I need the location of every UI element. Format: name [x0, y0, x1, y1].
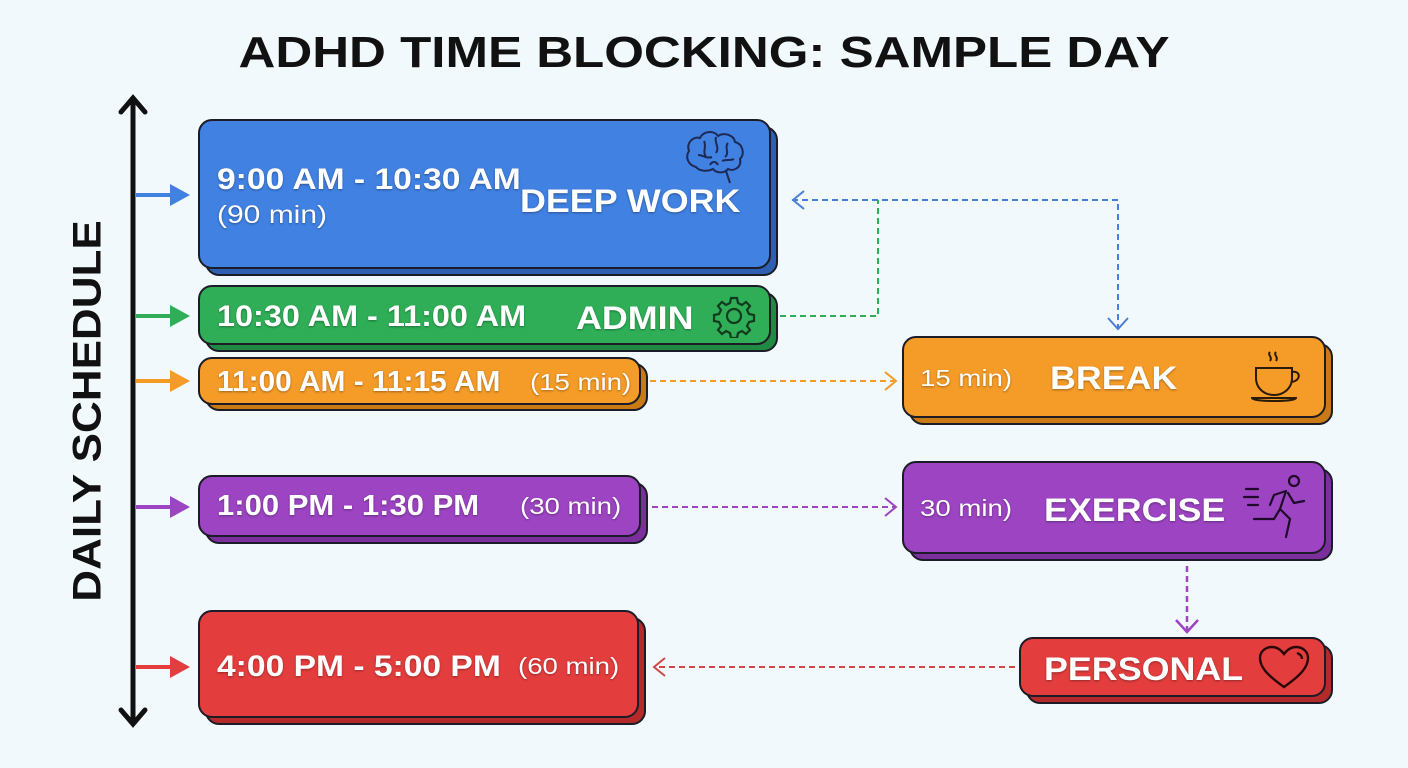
block: deep work — [198, 119, 771, 269]
axis arrows — [136, 184, 190, 678]
block: 1:00 PM: 1:00 PM - 1:30 PM — [217, 490, 479, 522]
icon: coffee cup — [1251, 351, 1300, 402]
icon: brain — [686, 131, 744, 184]
block: deep work: 9:00 AM - 10:30 AM — [217, 163, 521, 196]
block: 4:00 PM: 4:00 PM - 5:00 PM — [217, 650, 501, 683]
timeline axis — [121, 98, 145, 724]
block shadows — [205, 126, 778, 276]
block: deep work: DEEP WORK — [520, 183, 740, 219]
arrow: admin link — [780, 200, 878, 316]
icon: heart — [1258, 646, 1310, 688]
block: exercise: EXERCISE — [1044, 492, 1225, 528]
block: 1:00 PM: (30 min) — [520, 493, 621, 519]
arrow: deep work to break — [792, 191, 1128, 329]
block: break: 15 min) — [920, 365, 1012, 391]
block: admin: ADMIN — [576, 300, 693, 336]
block: exercise: 30 min) — [920, 495, 1012, 521]
block: 11:00: 11:00 AM - 11:15 AM — [217, 366, 500, 398]
block: 4:00 PM: (60 min) — [518, 653, 619, 679]
axis label: DAILY SCHEDULE — [66, 220, 110, 602]
block: admin — [198, 285, 771, 345]
block: 1:00 PM — [198, 475, 641, 537]
title: ADHD TIME BLOCKING: SAMPLE DAY — [238, 28, 1170, 77]
block: 11:00 — [198, 357, 641, 405]
block: personal — [1019, 637, 1326, 697]
block: admin: 10:30 AM - 11:00 AM — [217, 300, 526, 333]
block: deep work: (90 min) — [217, 201, 327, 229]
block: personal: PERSONAL — [1044, 651, 1243, 687]
icon: runner — [1242, 474, 1306, 538]
block: 4:00 PM — [198, 610, 639, 718]
block: 11:00: (15 min) — [530, 369, 631, 395]
icon: gear — [712, 296, 756, 338]
arrow: 11:00 to break — [650, 372, 896, 390]
arrow: exercise to personal — [1176, 566, 1198, 632]
block: exercise — [902, 461, 1326, 554]
arrow: personal to 4:00 — [654, 658, 1015, 676]
arrow: 1:00 to exercise — [652, 498, 896, 516]
block: break — [902, 336, 1326, 418]
block: break: BREAK — [1050, 360, 1177, 396]
